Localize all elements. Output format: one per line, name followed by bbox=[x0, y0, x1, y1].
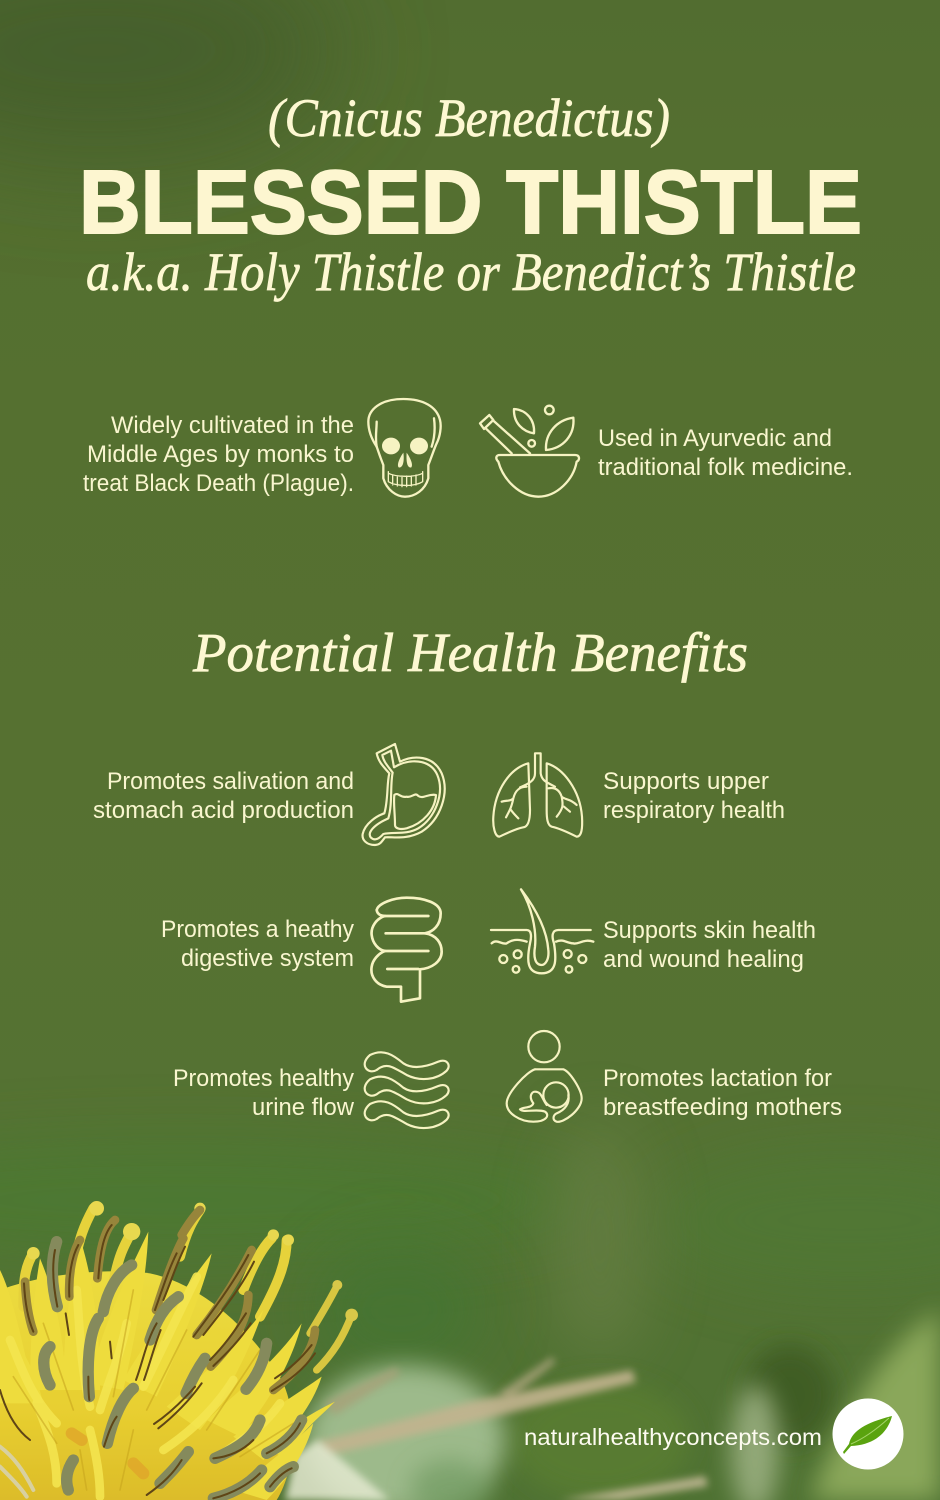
icon: water waves bbox=[365, 1052, 449, 1128]
icon: skull bbox=[368, 399, 441, 497]
text: middle ages: Widely cultivated in the bbox=[111, 412, 354, 439]
benefit text: respiratory: respiratory health bbox=[603, 797, 785, 824]
text: middle ages: treat Black Death (Plague). bbox=[83, 470, 354, 497]
icon: breastfeeding mother bbox=[507, 1031, 582, 1122]
icon: skin and hair follicle bbox=[491, 889, 593, 973]
benefit text: stomach: stomach acid production bbox=[93, 797, 354, 824]
text: ayurvedic bbox=[598, 425, 853, 481]
benefit text: skin: and wound healing bbox=[603, 946, 804, 973]
benefit text: digestive bbox=[161, 916, 355, 972]
benefit text: skin: Supports skin health bbox=[603, 917, 816, 944]
benefit text: urine bbox=[173, 1065, 355, 1121]
benefit text: digestive: Promotes a heathy bbox=[161, 916, 355, 943]
text: ayurvedic: traditional folk medicine. bbox=[598, 454, 853, 481]
benefit text: respiratory bbox=[603, 768, 785, 824]
icon: stomach bbox=[363, 744, 445, 845]
text: middle ages bbox=[83, 412, 354, 497]
benefit text: lactation: breastfeeding mothers bbox=[603, 1094, 842, 1121]
icon: intestines bbox=[371, 898, 442, 1002]
title: blessed thistle: BLESSED THISTLE bbox=[79, 153, 862, 253]
icon: mortar and pestle bbox=[480, 406, 579, 497]
benefit text: stomach bbox=[93, 768, 354, 824]
website url: naturalhealthyconcepts.com bbox=[524, 1424, 822, 1450]
benefit text: urine: urine flow bbox=[252, 1094, 354, 1121]
photo: yellow thistle flower bbox=[0, 1201, 358, 1500]
icon: lungs bbox=[493, 753, 582, 837]
subtitle: other names: a.k.a. Holy Thistle or Benedict’s Thistle bbox=[86, 242, 856, 302]
benefit text: stomach: Promotes salivation and bbox=[107, 768, 354, 795]
benefit text: lactation: Promotes lactation for bbox=[603, 1065, 832, 1092]
benefit text: digestive: digestive system bbox=[181, 945, 354, 972]
text: ayurvedic: Used in Ayurvedic and bbox=[598, 425, 832, 452]
logo: leaf in white circle bbox=[832, 1398, 904, 1470]
title: scientific name: (Cnicus Benedictus) bbox=[268, 88, 670, 148]
text: middle ages: Middle Ages by monks to bbox=[87, 441, 354, 468]
benefit text: skin bbox=[603, 917, 816, 973]
benefit text: urine: Promotes healthy bbox=[173, 1065, 355, 1092]
benefit text: lactation bbox=[603, 1065, 842, 1121]
benefit text: respiratory: Supports upper bbox=[603, 768, 769, 795]
heading: potential health benefits: Potential Health Benefits bbox=[192, 622, 748, 683]
